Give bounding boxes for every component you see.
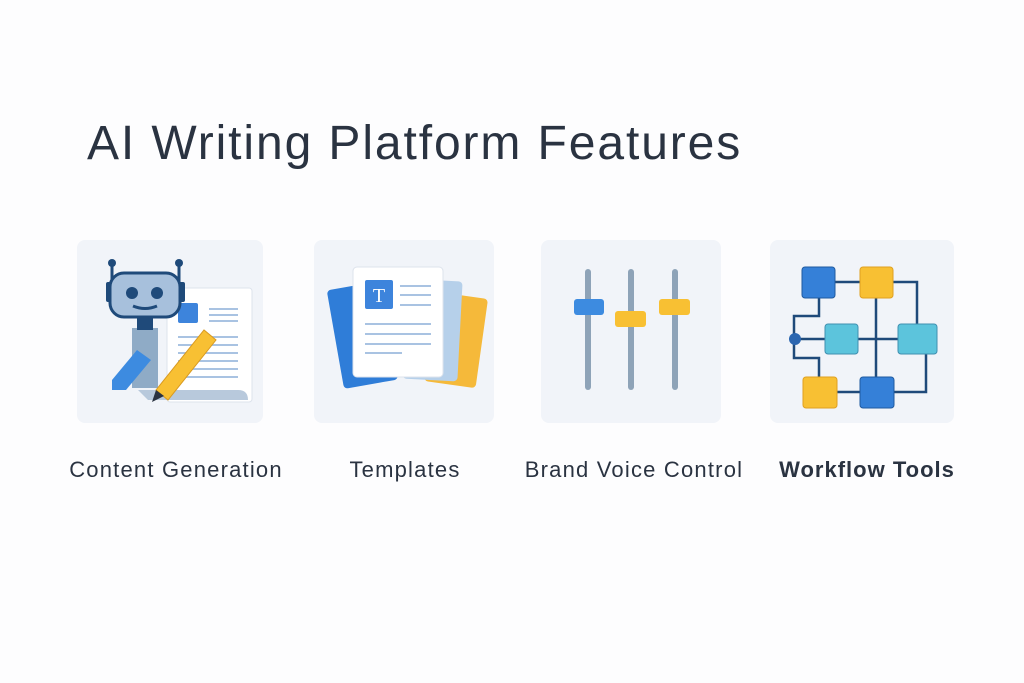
icon: sliders [574, 272, 690, 387]
label: brand voice control: Brand Voice Control [525, 457, 743, 482]
panel: workflow [770, 240, 954, 423]
panel: content generation [77, 240, 263, 423]
icon: templates: T [373, 285, 385, 307]
title: AI Writing Platform Features [87, 117, 742, 170]
panel: brand voice [541, 240, 721, 423]
icon: robot writing [106, 259, 252, 402]
icon: templates [327, 267, 488, 389]
label: templates: Templates [349, 457, 461, 482]
label: workflow tools: Workflow Tools [779, 457, 955, 482]
label: content generation: Content Generation [69, 457, 283, 482]
icon: workflow [789, 267, 937, 408]
panel: templates [314, 240, 494, 423]
